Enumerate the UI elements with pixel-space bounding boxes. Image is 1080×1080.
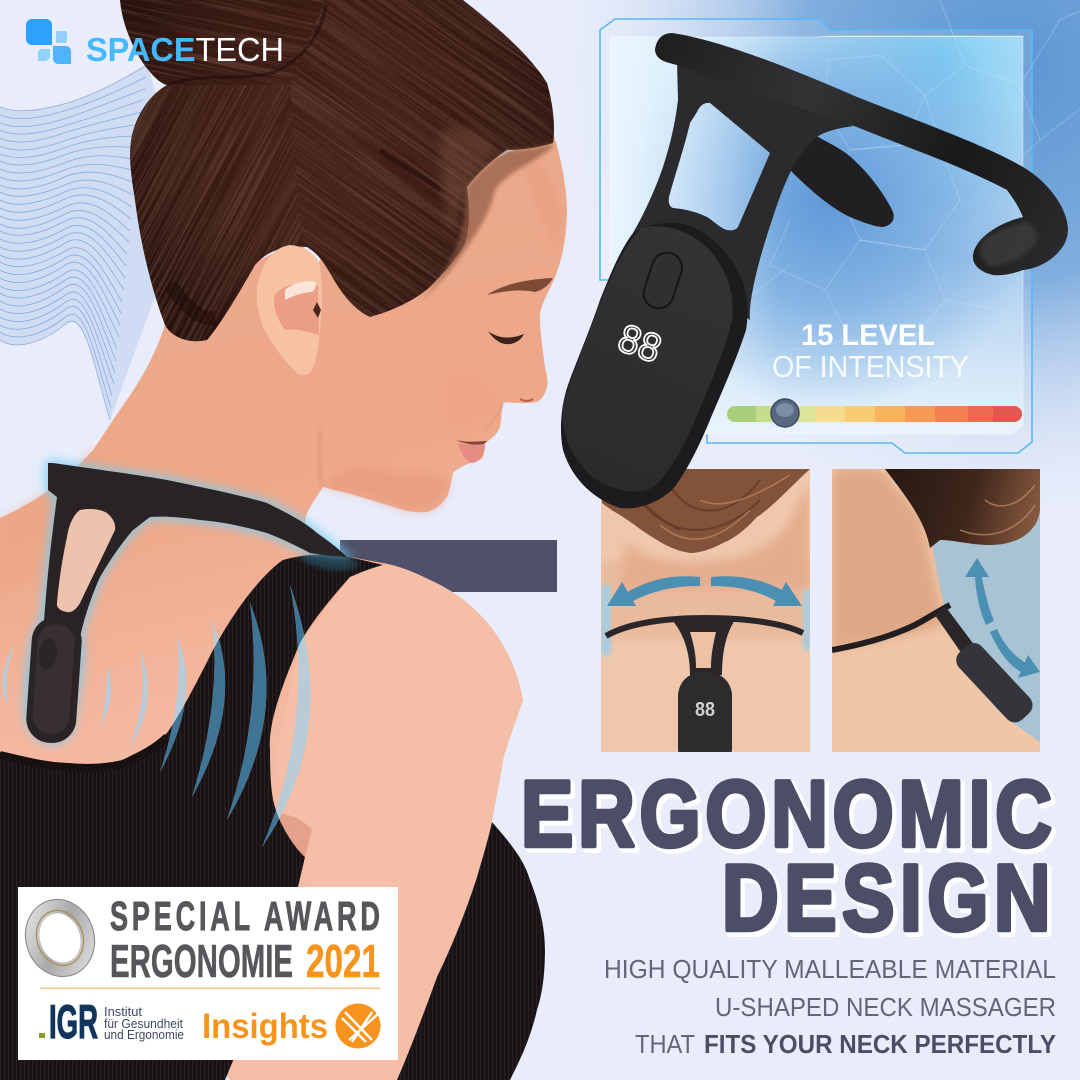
dark decorative bar xyxy=(340,540,557,592)
IGR logo: für Gesundheit xyxy=(104,1016,183,1031)
IGR logo: IGR xyxy=(49,995,98,1048)
headline white offset: DESIGN xyxy=(725,849,1059,954)
back figure skin xyxy=(0,240,523,1080)
description text: HIGH QUALITY MALLEABLE MATERIAL xyxy=(604,954,1056,984)
description text: THAT xyxy=(635,1029,695,1059)
arrow up xyxy=(965,558,994,625)
brand name: SPACETECH xyxy=(86,31,284,68)
award year: 2021 xyxy=(306,935,380,987)
headline xyxy=(521,762,1060,954)
arm overlap xyxy=(275,564,523,1000)
neck band xyxy=(655,33,1068,275)
background wave line pattern xyxy=(0,65,190,420)
neck massager on back xyxy=(25,463,347,745)
award subtitle: ERGONOMIE xyxy=(110,935,293,987)
headline white offset xyxy=(524,765,1060,954)
IGR logo: Institut xyxy=(104,1004,142,1019)
vibration waves pale xyxy=(2,585,310,847)
facial features xyxy=(456,278,553,463)
band shoulder glint xyxy=(300,555,360,571)
arrow left xyxy=(607,576,700,606)
headline main xyxy=(521,762,1057,951)
IGR logo: und Ergonomie xyxy=(104,1027,184,1042)
massager side view xyxy=(832,605,1037,727)
massager front view xyxy=(606,618,803,772)
vibration waves dark over tank xyxy=(160,586,304,847)
intensity slider xyxy=(727,399,1022,427)
display digits: 88 xyxy=(612,316,667,372)
photo: neck width xyxy=(601,469,811,772)
stem xyxy=(633,62,853,320)
arrow down xyxy=(990,629,1040,678)
button xyxy=(640,249,686,312)
headline white offset: ERGONOMIC xyxy=(524,765,1060,870)
intensity heading: 15 LEVEL xyxy=(801,319,935,352)
panel: intensity frame xyxy=(600,19,1032,453)
headline main: DESIGN xyxy=(722,846,1056,951)
award badge xyxy=(16,887,398,1060)
icon: silver ring xyxy=(16,890,104,986)
face xyxy=(300,133,567,512)
logo: Spacetech xyxy=(26,19,284,68)
massager product xyxy=(561,33,1068,508)
description text: U-SHAPED NECK MASSAGER xyxy=(715,992,1056,1022)
ear xyxy=(257,245,322,375)
photo: neck tilt xyxy=(832,469,1040,752)
arrow right xyxy=(711,576,802,606)
black tank top xyxy=(0,555,545,1080)
intensity heading xyxy=(772,319,969,384)
hair xyxy=(120,0,554,342)
description text: FITS YOUR NECK PERFECTLY xyxy=(704,1029,1056,1059)
headline main: ERGONOMIC xyxy=(521,762,1057,867)
massager front view: 88 xyxy=(695,699,715,721)
hexagon mesh decoration xyxy=(720,0,1080,400)
Insights logo xyxy=(202,1004,380,1048)
IGR logo xyxy=(39,995,184,1048)
pod xyxy=(561,223,748,508)
icon: logo squares xyxy=(26,19,71,64)
award title: SPECIAL AWARD xyxy=(110,895,384,939)
second arm behind xyxy=(710,103,894,227)
Insights logo: Insights xyxy=(202,1007,328,1046)
description text xyxy=(604,954,1056,1059)
intensity heading: OF INTENSITY xyxy=(772,349,969,384)
